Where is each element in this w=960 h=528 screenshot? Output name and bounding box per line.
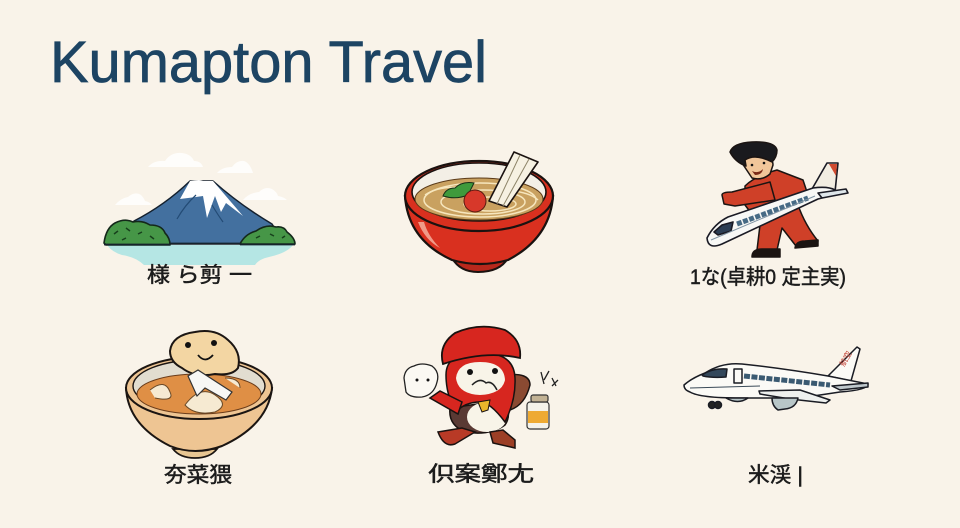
icon: noodle bowl with dumpling mascot — [126, 331, 272, 458]
icon: passenger plane: 航空 — [837, 349, 854, 368]
man — [722, 142, 818, 257]
icon: red noodle bowl — [405, 152, 553, 272]
label: mascot: 伿案鄭尢 — [428, 463, 534, 486]
label: plane: 米渓 | — [748, 464, 803, 487]
icon: passenger plane — [684, 347, 868, 410]
title: Kumapton Travel — [50, 30, 487, 95]
icon: red hooded mascot — [404, 327, 558, 448]
label: man and plane: 1な(卓耕0 定主実) — [690, 266, 846, 289]
icon: mountain landscape — [104, 153, 295, 265]
label: soup bowl: 夯菜猥 — [164, 464, 232, 487]
icon: man carrying plane — [707, 142, 848, 257]
plane — [707, 163, 848, 246]
label: mountain: 様 ら剪 一 — [147, 264, 252, 287]
